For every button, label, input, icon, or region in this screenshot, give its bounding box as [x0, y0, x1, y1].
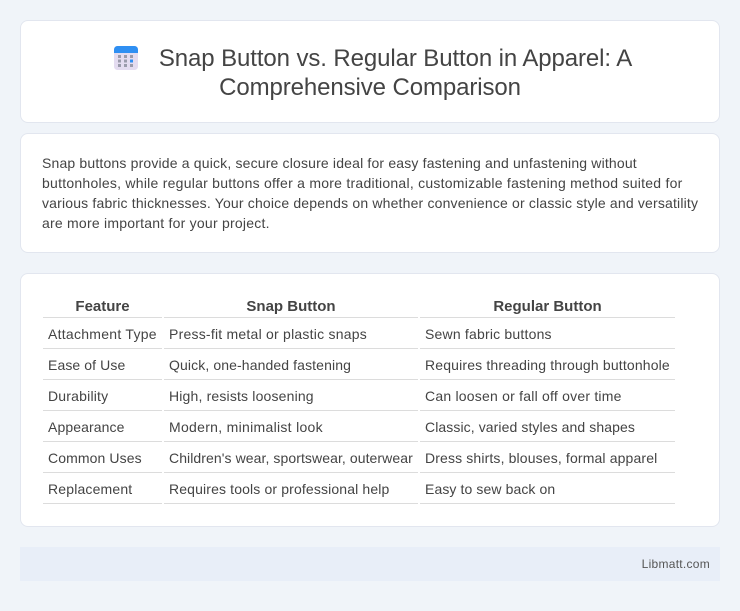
row: common uses: Children's wear, sportswear, outerwear — [169, 450, 413, 466]
row: replacement: Requires tools or professional help — [169, 481, 389, 497]
intro panel — [20, 133, 720, 253]
row: replacement: Replacement — [48, 481, 132, 497]
table header: Snap Button — [246, 298, 336, 315]
row: durability: Durability — [48, 388, 108, 404]
row: appearance: Appearance — [48, 419, 125, 435]
intro paragraph: various fabric thicknesses. Your choice depends on whether convenience or classic style and versatility — [42, 195, 698, 211]
intro paragraph — [42, 155, 698, 231]
row: appearance — [43, 419, 675, 442]
intro paragraph: are more important for your project. — [42, 215, 270, 231]
table header: Feature — [75, 298, 130, 315]
footer bar — [20, 547, 720, 581]
row: common uses: Dress shirts, blouses, formal apparel — [425, 450, 657, 466]
row: ease of use — [43, 357, 675, 380]
title: Comprehensive Comparison — [219, 74, 521, 101]
row: durability: Can loosen or fall off over time — [425, 388, 622, 404]
row: durability: High, resists loosening — [169, 388, 314, 404]
footer text: Libmatt.com — [642, 557, 710, 571]
row: ease of use: Quick, one-handed fastening — [169, 357, 351, 373]
row: durability — [43, 388, 675, 411]
row: appearance: Classic, varied styles and shapes — [425, 419, 635, 435]
comparison table — [43, 298, 675, 504]
row: common uses: Common Uses — [48, 450, 142, 466]
row: attachment type — [43, 326, 675, 349]
row: ease of use: Ease of Use — [48, 357, 125, 373]
row: replacement: Easy to sew back on — [425, 481, 555, 497]
row: attachment type: Sewn fabric buttons — [425, 326, 552, 342]
table panel — [20, 273, 720, 527]
intro paragraph: buttonholes, while regular buttons offer a more traditional, customizable fastening method suited for — [42, 175, 683, 191]
row: attachment type: Press-fit metal or plastic snaps — [169, 326, 367, 342]
row: attachment type: Attachment Type — [48, 326, 157, 342]
row: common uses — [43, 450, 675, 473]
title: Snap Button vs. Regular Button in Apparel: A — [159, 45, 632, 72]
row: ease of use: Requires threading through buttonhole — [425, 357, 670, 373]
row: appearance: Modern, minimalist look — [169, 419, 323, 435]
table header — [43, 298, 675, 318]
table header: Regular Button — [493, 298, 602, 315]
title — [159, 45, 632, 101]
intro paragraph: Snap buttons provide a quick, secure closure ideal for easy fastening and unfastening without — [42, 155, 637, 171]
icon: calendar — [114, 46, 138, 70]
header panel — [20, 20, 720, 123]
